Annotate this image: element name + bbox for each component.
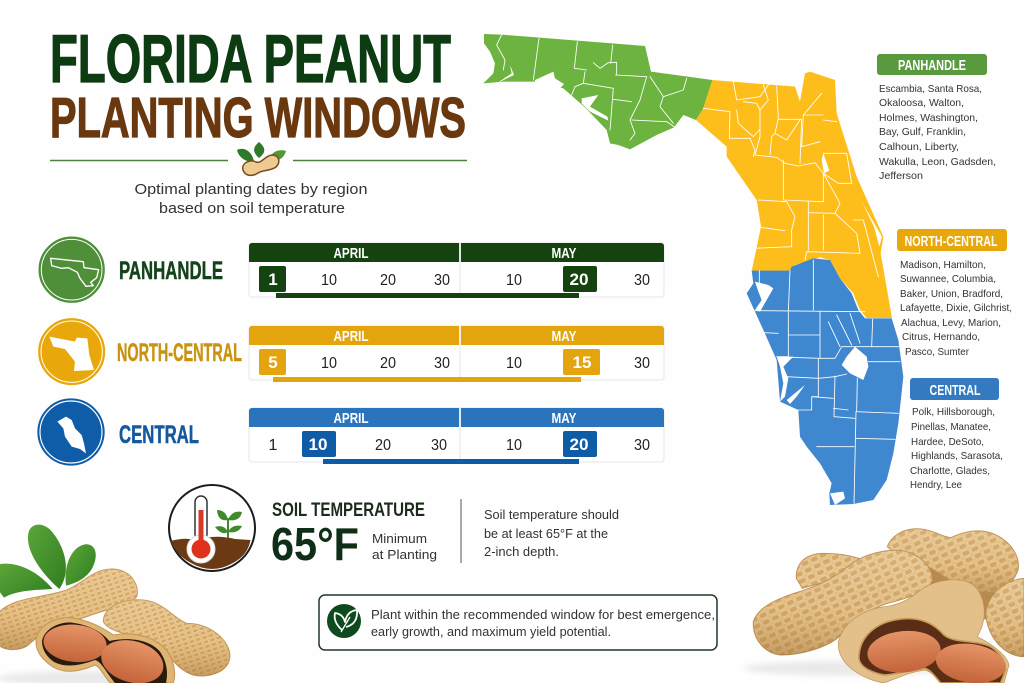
calendar: panhandle: 10 xyxy=(321,272,337,289)
legend: panhandle counties: Jefferson xyxy=(879,170,923,182)
label: north-central: NORTH-CENTRAL xyxy=(117,339,242,367)
lake okeechobee xyxy=(842,347,868,380)
legend: central counties xyxy=(910,378,1003,491)
calendar: north-central: 5 xyxy=(268,353,278,372)
calendar: central: 30 xyxy=(431,437,447,454)
callout: Plant within the recommended window for best emergence, xyxy=(371,608,715,622)
legend: panhandle counties: PANHANDLE xyxy=(898,57,966,74)
legend: central counties: Hardee, DeSoto, xyxy=(911,436,984,448)
legend: panhandle counties xyxy=(877,54,996,182)
icon: leaf xyxy=(327,604,361,638)
calendar: central: 30 xyxy=(634,437,650,454)
peanuts: bottom right xyxy=(744,529,1024,683)
calendar: north-central: 15 xyxy=(572,353,592,372)
soil temperature stat: Minimum xyxy=(372,532,427,546)
subtitle xyxy=(134,181,368,217)
soil temperature note: be at least 65°F at the xyxy=(484,527,608,541)
leaves xyxy=(0,525,96,598)
calendar: central xyxy=(249,408,664,464)
legend: north-central counties xyxy=(897,229,1012,358)
calendar: north-central: 30 xyxy=(434,355,450,372)
legend: north-central counties: Suwannee, Columbia, xyxy=(900,273,996,285)
calendar: central: 10 xyxy=(308,435,328,454)
legend: north-central counties: Madison, Hamilton, xyxy=(900,259,986,271)
map region: north-central xyxy=(696,72,892,318)
vertical divider xyxy=(460,499,462,563)
calendar: panhandle: APRIL xyxy=(334,245,368,262)
map region: central xyxy=(747,258,903,505)
legend: panhandle counties: Calhoun, Liberty, xyxy=(879,141,959,153)
title xyxy=(50,21,466,150)
title divider with peanut icon xyxy=(50,142,467,175)
legend: north-central counties: Citrus, Hernando, xyxy=(902,331,980,343)
soil temperature stat: SOIL TEMPERATURE xyxy=(272,500,425,521)
legend: north-central counties: Lafayette, Dixie, Gilchrist, xyxy=(900,302,1012,314)
title: PLANTING WINDOWS xyxy=(50,86,466,150)
calendar: north-central xyxy=(249,326,664,382)
legend: panhandle counties: Wakulla, Leon, Gadsden, xyxy=(879,156,996,168)
label: panhandle: PANHANDLE xyxy=(119,257,223,285)
soil temperature stat: at Planting xyxy=(372,548,437,562)
kernels xyxy=(42,622,168,683)
icon: north-central badge xyxy=(39,319,105,385)
calendar: north-central: 10 xyxy=(321,355,337,372)
map: Florida regions xyxy=(483,34,903,505)
peanuts: bottom left xyxy=(0,525,230,683)
legend: panhandle counties: Holmes, Washington, xyxy=(879,112,978,124)
calendar: central: MAY xyxy=(552,410,576,427)
soil temperature stat xyxy=(271,500,437,570)
legend: central counties: Pinellas, Manatee, xyxy=(911,421,991,433)
calendar: panhandle: 10 xyxy=(506,272,522,289)
calendar: panhandle: MAY xyxy=(552,245,576,262)
calendar: panhandle: 30 xyxy=(634,272,650,289)
calendar: panhandle: 20 xyxy=(570,270,588,289)
legend: central counties: Highlands, Sarasota, xyxy=(911,450,1003,462)
legend: north-central counties: Baker, Union, Bradford, xyxy=(900,288,1003,300)
calendar: north-central: MAY xyxy=(552,328,576,345)
map region: panhandle xyxy=(483,34,712,149)
callout xyxy=(319,595,717,650)
legend: panhandle counties: Escambia, Santa Rosa, xyxy=(879,83,982,95)
calendar: central: 1 xyxy=(269,437,278,454)
legend: central counties: Polk, Hillsborough, xyxy=(912,406,995,418)
calendar: central: 20 xyxy=(375,437,391,454)
calendar: panhandle: 30 xyxy=(434,272,450,289)
legend: north-central counties: Alachua, Levy, Marion, xyxy=(901,317,1001,329)
legend: panhandle counties: Bay, Gulf, Franklin, xyxy=(879,126,966,138)
legend: north-central counties: Pasco, Sumter xyxy=(905,346,969,358)
calendar: panhandle: 20 xyxy=(380,272,396,289)
calendar: north-central: APRIL xyxy=(334,328,368,345)
soil temperature note: Soil temperature should xyxy=(484,508,619,522)
subtitle: Optimal planting dates by region xyxy=(134,181,368,198)
legend: central counties: CENTRAL xyxy=(930,382,980,399)
calendar: north-central: 10 xyxy=(506,355,522,372)
legend: central counties: Hendry, Lee xyxy=(910,479,962,491)
calendar: central: 10 xyxy=(506,437,522,454)
legend: panhandle counties: Okaloosa, Walton, xyxy=(879,97,964,109)
calendar: panhandle xyxy=(249,243,664,298)
kernels xyxy=(866,628,1008,683)
calendar: panhandle: 1 xyxy=(268,270,278,289)
icon: central badge xyxy=(37,398,105,466)
calendar: central: APRIL xyxy=(334,410,368,427)
soil temperature note: 2-inch depth. xyxy=(484,545,559,559)
calendar: north-central: 20 xyxy=(380,355,396,372)
title: FLORIDA PEANUT xyxy=(50,21,451,97)
legend: central counties: Charlotte, Glades, xyxy=(910,465,990,477)
calendar: north-central: 30 xyxy=(634,355,650,372)
soil temperature stat: 65°F xyxy=(271,518,359,570)
label: central: CENTRAL xyxy=(119,421,199,449)
icon: panhandle badge xyxy=(39,237,104,302)
callout: early growth, and maximum yield potential. xyxy=(371,625,611,639)
subtitle: based on soil temperature xyxy=(159,200,345,217)
calendar: central: 20 xyxy=(570,435,588,454)
soil temperature note xyxy=(484,508,619,559)
icon: thermometer and seedling xyxy=(169,485,255,571)
